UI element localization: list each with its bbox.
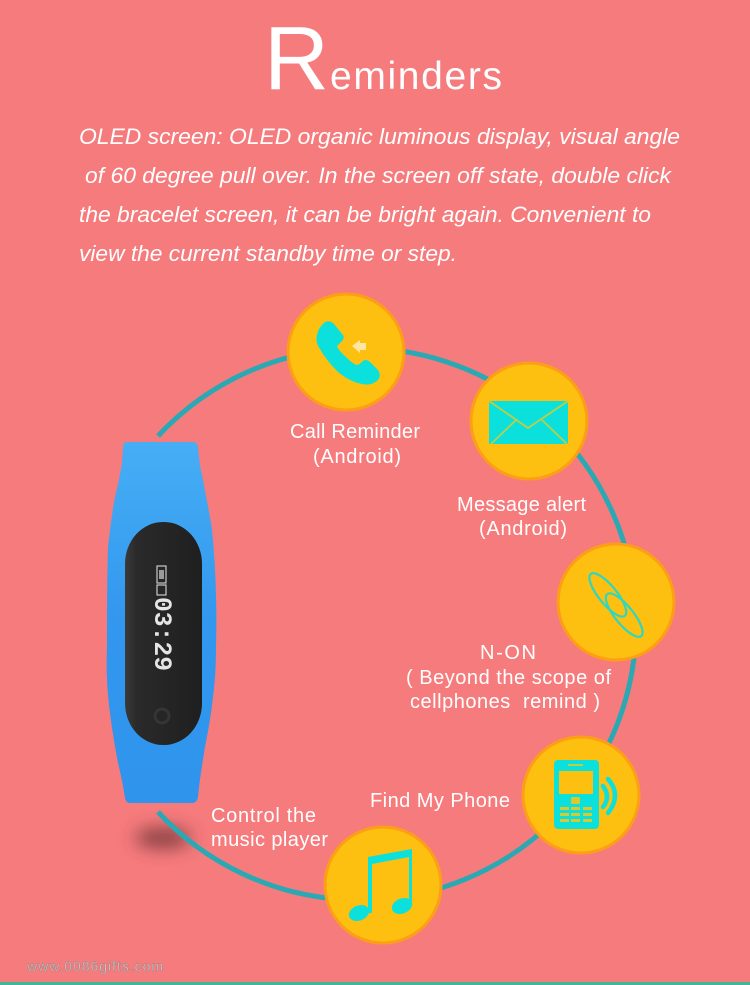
- description text: [79, 124, 680, 266]
- bottom strip: [0, 982, 750, 985]
- label: N-ON: cellphones remind ): [410, 691, 600, 713]
- icon: music notes: [346, 849, 415, 924]
- label: N-ON: ( Beyond the scope of: [406, 667, 611, 689]
- screen button: [155, 709, 169, 723]
- label: message alert: Message alert: [457, 494, 586, 516]
- label: message alert: (Android): [479, 518, 567, 540]
- label: control the music player: [211, 805, 328, 851]
- description text: view the current standby time or step.: [79, 241, 457, 266]
- label: find my phone: Find My Phone: [370, 790, 510, 812]
- feature: N-ON: [406, 544, 674, 713]
- icon circle: music: [325, 827, 441, 943]
- feature: message alert: [457, 363, 587, 540]
- icon: incoming arrow: [352, 340, 366, 353]
- label: call reminder: Call Reminder: [290, 421, 420, 443]
- label: N-ON: [406, 642, 611, 713]
- description text: the bracelet screen, it can be bright again. Convenient to: [79, 202, 651, 227]
- label: N-ON: N-ON: [480, 642, 536, 664]
- label: call reminder: [290, 421, 420, 468]
- icon circle: message: [471, 363, 587, 479]
- label: control the music player: music player: [211, 829, 328, 851]
- description text: of 60 degree pull over. In the screen off state, double click: [85, 163, 673, 188]
- icon circle: phone: [288, 294, 404, 410]
- screen: [125, 522, 202, 745]
- band: [107, 442, 216, 803]
- icon: envelope: [489, 401, 568, 444]
- watermark: www.0086gifts.com: [26, 958, 163, 974]
- feature: find my phone: [370, 737, 639, 853]
- icon circle: link: [558, 544, 674, 660]
- label: call reminder: (Android): [313, 446, 401, 468]
- bracelet: [107, 442, 216, 803]
- feature: music player: [211, 805, 441, 943]
- icon: cellphone: [554, 760, 615, 829]
- description text: OLED screen: OLED organic luminous display, visual angle: [79, 124, 680, 149]
- label: message alert: [457, 494, 586, 540]
- icon circle: cellphone: [523, 737, 639, 853]
- battery and pedometer glyph: [157, 566, 166, 595]
- title: Reminders: [264, 9, 502, 109]
- icon: phone handset: [316, 321, 380, 385]
- ring connecting features: [158, 348, 636, 900]
- icon: chain link: [584, 568, 648, 642]
- feature: call reminder: [288, 294, 420, 468]
- label: control the music player: Control the: [211, 805, 316, 827]
- band shadow: [135, 828, 191, 848]
- time display: 03:29: [147, 597, 176, 671]
